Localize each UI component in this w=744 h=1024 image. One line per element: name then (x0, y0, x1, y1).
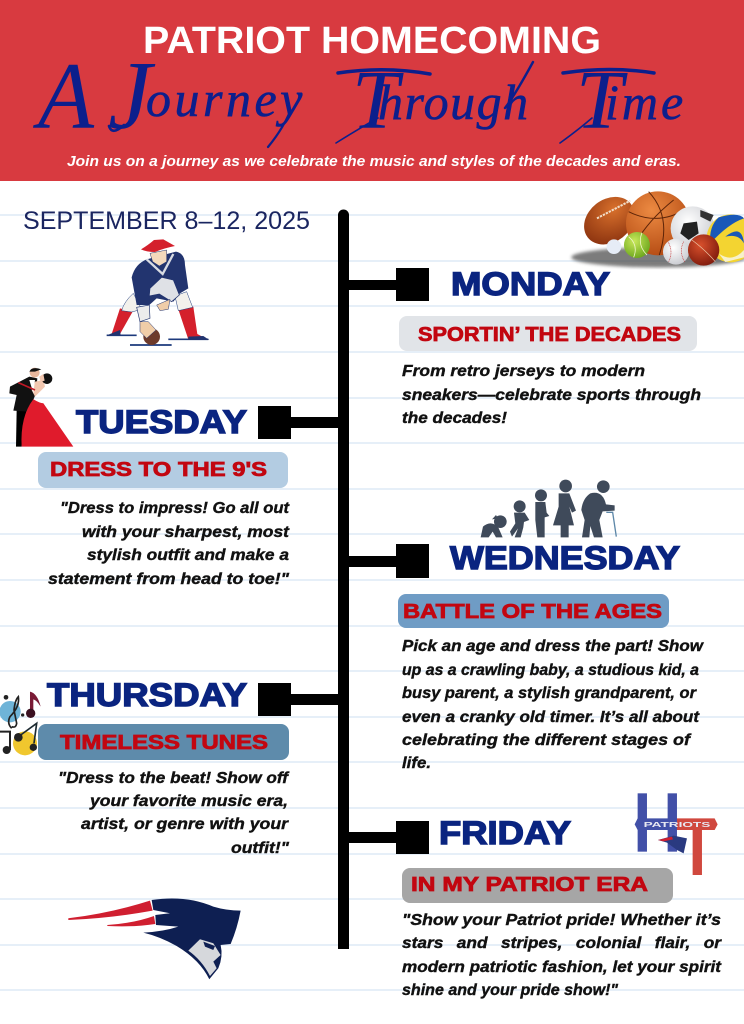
theme pill: Sportin' the Decades (399, 316, 697, 351)
theme pill: Sportin' the Decades: SPORTIN’ THE DECADES (418, 323, 681, 346)
icon: stages of life silhouettes (481, 480, 616, 537)
text: Tuesday description: with your sharpest, most (82, 524, 290, 541)
text: Thursday description: artist, or genre with your (81, 816, 289, 833)
text: Monday description: sneakers—celebrate sports through (402, 387, 701, 404)
text: Tuesday description: statement from head to toe!" (48, 571, 289, 588)
text: Friday description: stars and stripes, colonial flair, or (402, 935, 722, 952)
thursday connector (258, 683, 338, 716)
friday connector (349, 821, 429, 854)
monday connector (349, 268, 429, 301)
text: Friday description (402, 912, 722, 999)
heading: Friday: FRIDAY (439, 815, 571, 851)
icon: pile of sports balls (571, 187, 744, 267)
heading: Wednesday: WEDNESDAY (450, 540, 680, 576)
script title: A Journey Through Time: A (32, 43, 95, 149)
timeline spine (338, 210, 349, 949)
script title: A Journey Through Time: hrough (378, 74, 530, 130)
text: Thursday description: outfit!" (231, 840, 289, 857)
script title: A Journey Through Time: T (352, 54, 404, 147)
text: Wednesday description: up as a crawling baby, a studious kid, a (402, 662, 699, 679)
text: Monday description (402, 363, 701, 427)
script title: A Journey Through Time: T (576, 54, 628, 147)
text: Thursday description: "Dress to the beat! Show off (58, 770, 290, 787)
text: Wednesday description: life. (402, 755, 431, 772)
header banner (0, 0, 744, 181)
theme pill: Dress to the 9's: DRESS TO THE 9'S (50, 458, 267, 481)
script title: A Journey Through Time: ime (605, 74, 686, 130)
text: Monday description: From retro jerseys to modern (402, 363, 645, 380)
icon: patriot lineman mascot (107, 239, 209, 345)
heading: Monday: MONDAY (451, 266, 610, 302)
text: Tuesday description (48, 500, 290, 588)
text: Wednesday description: even a cranky old timer. It’s all about (402, 709, 700, 726)
tuesday connector (258, 406, 338, 439)
text: Friday description: modern patriotic fashion, let your spirit (402, 959, 722, 976)
theme pill: In My Patriot Era (402, 868, 673, 903)
icon: HT patriots logo: PATRIOTS (644, 820, 710, 829)
theme pill: Dress to the 9's (38, 452, 288, 488)
wednesday connector (349, 544, 429, 578)
text: Wednesday description: Pick an age and dress the part! Show (402, 638, 705, 655)
subtitle: Join us on a journey as we celebrate the music and styles of the decades and eras. (67, 154, 681, 170)
text: Tuesday description: "Dress to impress! Go all out (60, 500, 290, 517)
date: SEPTEMBER 8–12, 2025 (23, 207, 310, 235)
theme pill: Battle of the Ages (398, 594, 669, 628)
heading: Tuesday: TUESDAY (76, 404, 247, 440)
text: Monday description: the decades! (402, 410, 508, 427)
text: Wednesday description: busy parent, a stylish grandparent, or (402, 685, 697, 702)
icon: flying patriot logo (68, 898, 241, 979)
text: Friday description: "Show your Patriot pride! Whether it’s (402, 912, 721, 929)
icon: music notes (0, 692, 41, 755)
theme pill: In My Patriot Era: IN MY PATRIOT ERA (411, 873, 648, 896)
script title: A Journey Through Time (32, 42, 686, 150)
icon: dancing couple (9, 368, 73, 447)
text: Wednesday description (402, 638, 705, 772)
theme pill: Timeless Tunes: TIMELESS TUNES (60, 731, 268, 754)
script title: A Journey Through Time: ourney (146, 71, 306, 127)
theme pill: Battle of the Ages: BATTLE OF THE AGES (403, 600, 662, 623)
title: Patriot Homecoming: PATRIOT HOMECOMING (143, 20, 601, 62)
icon: HT patriots logo (635, 793, 718, 875)
text: Wednesday description: celebrating the different stages of (402, 732, 692, 749)
text: Friday description: shine and your pride show!" (402, 982, 618, 999)
script title: A Journey Through Time: J (108, 42, 156, 150)
text: Tuesday description: stylish outfit and make a (87, 547, 289, 564)
heading: Thursday: THURSDAY (47, 677, 247, 713)
text: Thursday description: your favorite music era, (89, 793, 288, 810)
theme pill: Timeless Tunes (38, 724, 289, 760)
text: Thursday description (58, 770, 290, 857)
